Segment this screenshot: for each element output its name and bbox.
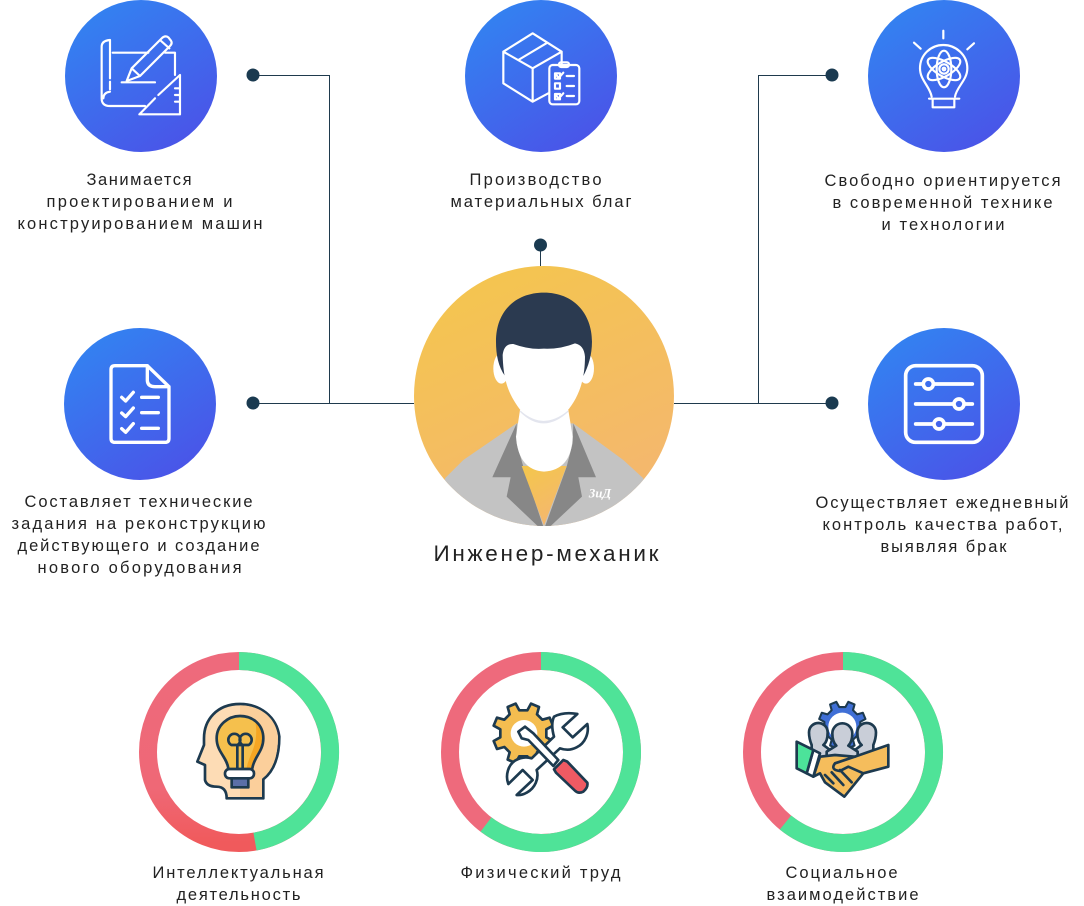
shirt	[522, 466, 567, 526]
icon: box with clipboard	[503, 33, 579, 104]
donut: intellectual	[148, 661, 330, 843]
text: действующего и создание	[18, 537, 260, 555]
icon: gear, wrench and screwdriver	[494, 704, 588, 795]
donut: physical	[450, 661, 632, 843]
ears	[493, 353, 594, 384]
text	[18, 171, 262, 233]
icon: document with checks	[111, 366, 169, 442]
text: Свободно ориентируется	[824, 172, 1060, 190]
text: Занимается	[86, 171, 192, 189]
icon: atom light bulb	[914, 31, 974, 107]
connector dots	[246, 68, 838, 410]
donut labels	[152, 864, 918, 904]
text: задания на реконструкцию	[12, 515, 266, 533]
donut labels: Физический труд	[460, 864, 621, 882]
item: quality control	[816, 328, 1068, 556]
text: Составляет технические	[24, 493, 252, 511]
logo: ЗиД	[588, 486, 611, 500]
text: контроль качества работ,	[822, 516, 1062, 534]
item: technical specs	[12, 328, 266, 577]
text: материальных благ	[450, 193, 632, 211]
text	[12, 493, 266, 577]
icon: team handshake	[797, 702, 888, 797]
connector lines	[253, 76, 832, 404]
donut labels: Социальное	[786, 864, 898, 882]
donut labels: деятельность	[176, 886, 300, 904]
hair	[496, 293, 592, 376]
text: проектированием и	[46, 193, 232, 211]
chin shadow	[521, 411, 568, 422]
text	[450, 171, 632, 211]
text: Производство	[470, 171, 602, 189]
text	[816, 494, 1068, 556]
icon: head with light bulb	[197, 704, 279, 798]
item: design	[18, 0, 262, 233]
icon: sliders	[906, 366, 982, 442]
lapels	[492, 423, 596, 527]
neck	[516, 410, 573, 472]
text: и технологии	[882, 216, 1004, 234]
donut labels: Интеллектуальная	[152, 864, 324, 882]
text: выявляя брак	[880, 538, 1007, 556]
donut: social	[752, 661, 934, 843]
text	[824, 172, 1060, 234]
jacket	[445, 423, 643, 527]
text: конструированием машин	[18, 215, 262, 233]
text: нового оборудования	[38, 559, 242, 577]
text: в современной технике	[832, 194, 1052, 212]
item: technology	[824, 0, 1060, 234]
donut labels: взаимодействие	[766, 886, 918, 904]
central title: Инженер-механик	[434, 541, 659, 566]
central avatar	[414, 266, 674, 527]
text: Осуществляет ежедневный	[816, 494, 1068, 512]
item: production	[450, 0, 632, 211]
icon: blueprint with pencil	[102, 36, 180, 114]
face	[503, 343, 585, 421]
